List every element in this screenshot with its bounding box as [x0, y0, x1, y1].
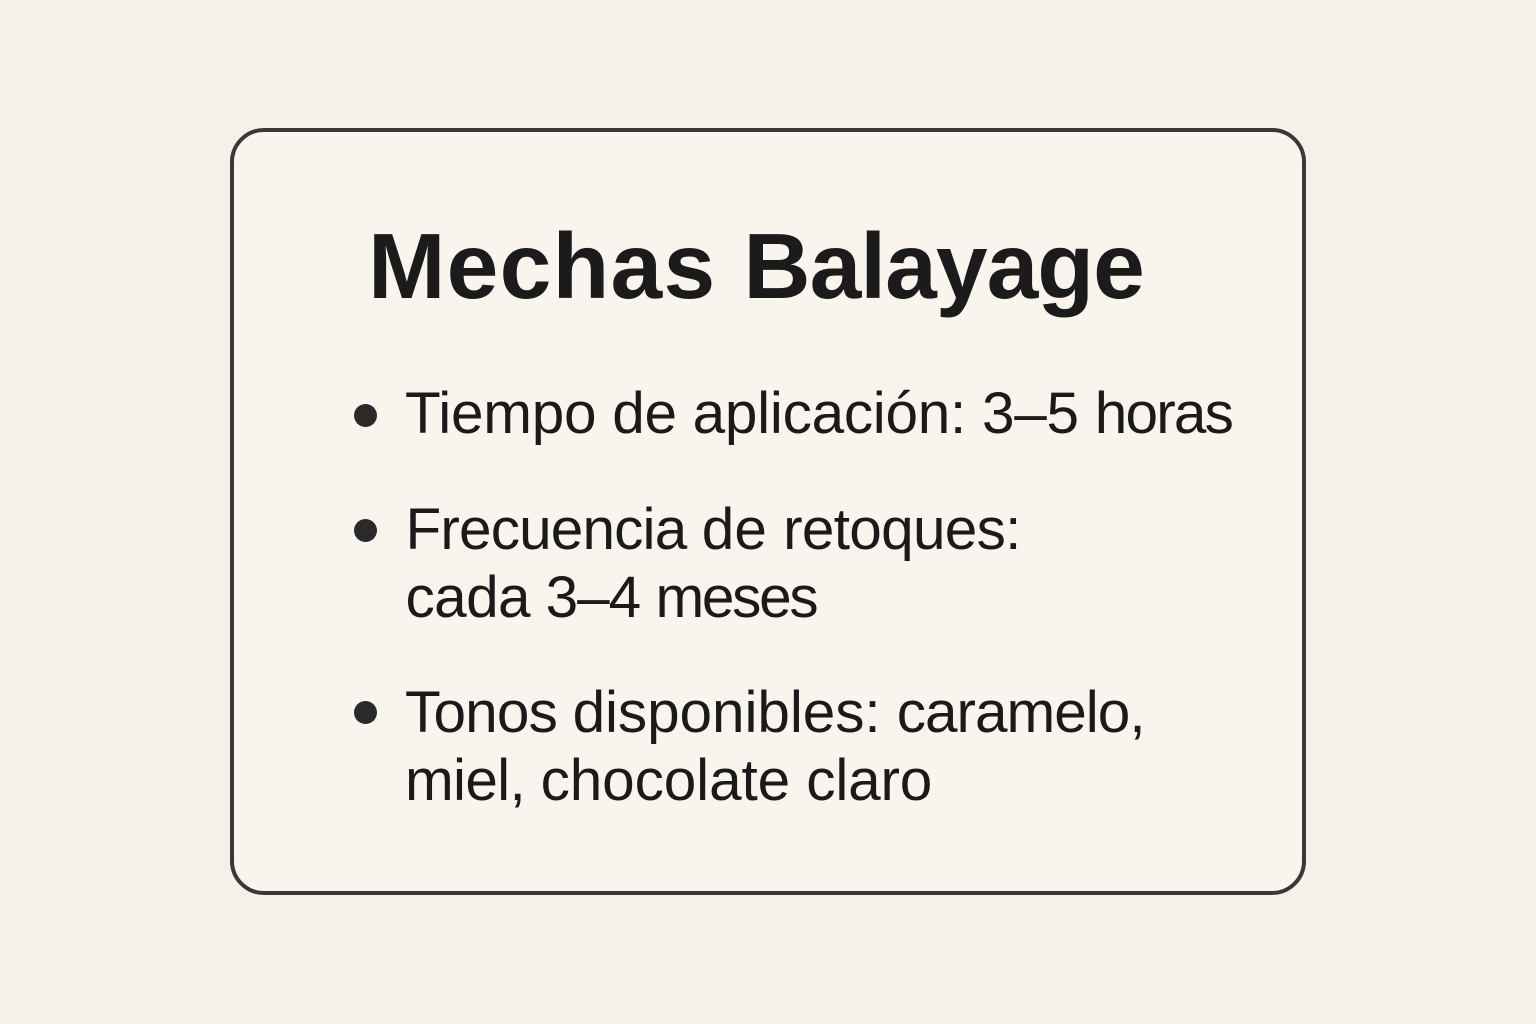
bullet: application time: [354, 381, 1232, 446]
text: cada 3–4 meses: [406, 565, 816, 630]
bullet dot: [354, 518, 377, 542]
text: Frecuencia de retoques:: [406, 497, 1021, 562]
bullet dot: [354, 701, 377, 724]
text: Tiempo de aplicación: 3–5 horas: [405, 381, 1232, 446]
text: [406, 497, 1021, 630]
text: miel, chocolate claro: [405, 748, 932, 813]
text: [405, 680, 1145, 813]
panel: card: [230, 128, 1306, 895]
bullet: touch-up frequency: [354, 497, 1021, 630]
bullet dot: [354, 404, 377, 426]
bullet: available tones: [354, 680, 1145, 813]
text: Tonos disponibles: caramelo,: [405, 680, 1145, 745]
title: Mechas Balayage: [368, 214, 1144, 318]
